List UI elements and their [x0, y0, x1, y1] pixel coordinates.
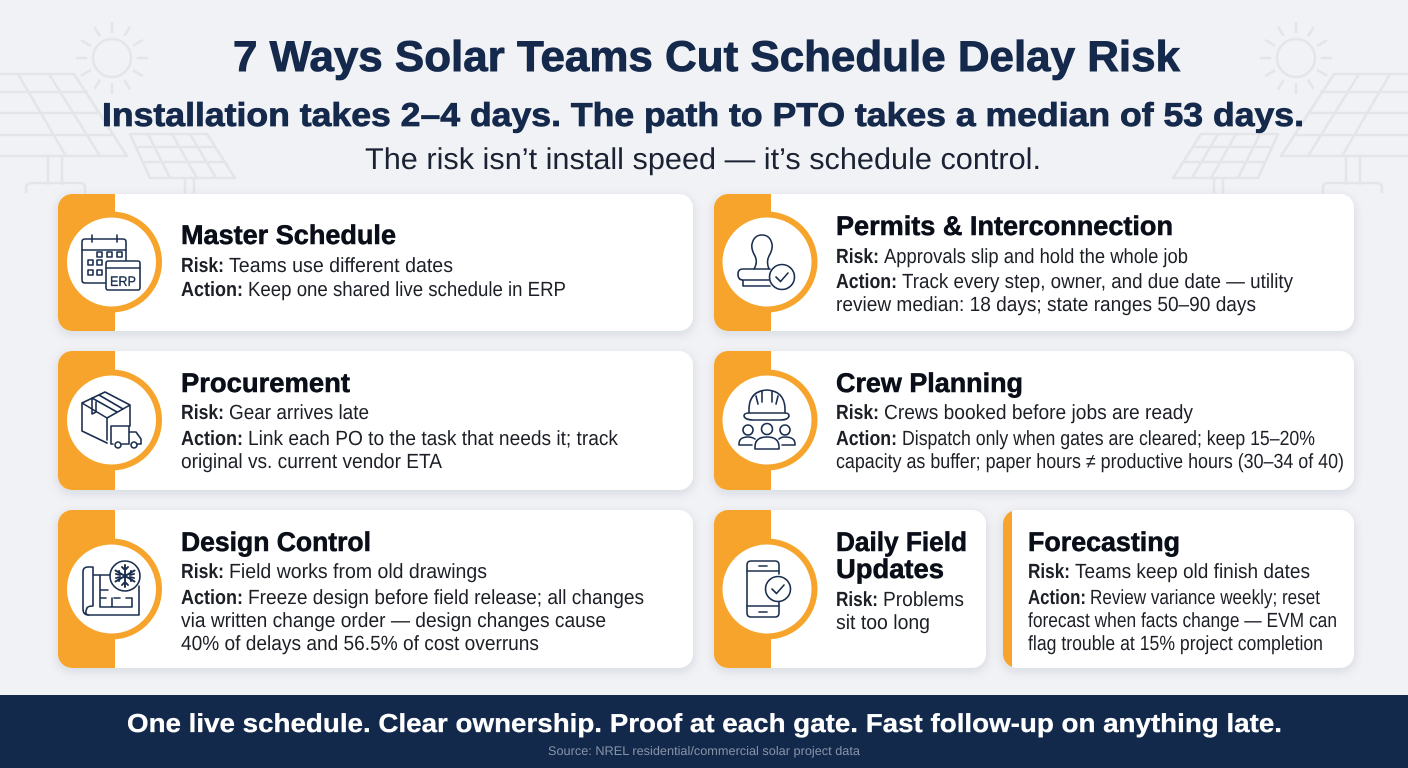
text: action: Action: [836, 270, 897, 293]
heading: daily field updates: Daily Field [836, 527, 967, 557]
text: action: flag trouble at 15% project completion [1028, 632, 1323, 655]
heading: daily field updates [836, 527, 967, 584]
footer message: One live schedule. Clear ownership. Proof at each gate. Fast follow-up on anything late. [127, 708, 1282, 738]
icon: box and truck [82, 392, 141, 448]
icon: phone with check [747, 561, 790, 617]
text: risk: Crews booked before jobs are ready [884, 401, 1194, 424]
text: risk: sit too long [836, 611, 930, 634]
text: risk: Risk: [1028, 560, 1070, 583]
text: risk: Risk: [836, 401, 879, 424]
text: action [836, 270, 1294, 316]
panel: permits and interconnection [714, 194, 1354, 331]
footer banner [0, 695, 1408, 768]
text: action [181, 586, 644, 655]
text: risk: Teams use different dates [229, 254, 453, 277]
text: action: Freeze design before field release; all changes [248, 586, 644, 609]
text: risk: Risk: [836, 588, 878, 611]
text: action: Action: [181, 278, 243, 301]
text: action: forecast when facts change — EVM can [1028, 609, 1337, 632]
text: action: capacity as buffer; paper hours ≠ productive hours (30–34 of 40) [836, 450, 1344, 473]
text: action [836, 427, 1344, 473]
title: 7 Ways Solar Teams Cut Schedule Delay Risk [233, 33, 1180, 81]
panel: design control [58, 510, 693, 668]
heading: daily field updates: Updates [836, 554, 944, 584]
icon: calendar with ERP window [82, 235, 140, 290]
panel: forecasting [1003, 510, 1354, 668]
text: action [181, 427, 619, 473]
text: risk: Approvals slip and hold the whole job [884, 245, 1188, 268]
text: risk: Teams keep old finish dates [1075, 560, 1310, 583]
text: risk: Risk: [181, 401, 224, 424]
text: action: Action: [1028, 586, 1086, 609]
panel: daily field updates [714, 510, 986, 668]
icon: calendar with ERP window: ERP [110, 273, 136, 289]
text: risk [836, 588, 964, 634]
text: action: Review variance weekly; reset [1090, 586, 1320, 609]
text: risk: Field works from old drawings [229, 560, 487, 583]
text: risk: Risk: [836, 245, 879, 268]
text: action: Link each PO to the task that needs it; track [248, 427, 619, 450]
text: action: Action: [181, 586, 243, 609]
text: action: via written change order — design changes cause [181, 609, 606, 632]
decorative solar art: right [1173, 23, 1408, 192]
panel: crew planning [714, 351, 1354, 490]
decorative solar art: left [0, 23, 235, 192]
text: risk: Risk: [181, 560, 224, 583]
tagline: The risk isn’t install speed — it’s schedule control. [365, 143, 1041, 176]
text: risk: Gear arrives late [229, 401, 369, 424]
text: action: Keep one shared live schedule in ERP [248, 278, 566, 301]
text: action: Action: [181, 427, 243, 450]
subtitle: Installation takes 2–4 days. The path to PTO takes a median of 53 days. [102, 96, 1304, 133]
heading: crew planning: Crew Planning [836, 368, 1023, 398]
heading: permits and interconnection: Permits & Interconnection [836, 211, 1173, 241]
icon: hard hat and crew [739, 390, 795, 449]
text: risk: Risk: [181, 254, 224, 277]
text: risk: Problems [883, 588, 964, 611]
icon: blueprint with snowflake [83, 561, 140, 615]
text: action: Action: [836, 427, 897, 450]
text: action [1028, 586, 1337, 655]
icon: stamp with check [738, 235, 794, 290]
text: action: review median: 18 days; state ranges 50–90 days [836, 293, 1256, 316]
header [102, 33, 1304, 176]
text: action: Track every step, owner, and due date — utility [902, 270, 1294, 293]
text: action: original vs. current vendor ETA [181, 450, 442, 473]
source note: Source: NREL residential/commercial solar project data [548, 744, 860, 758]
panel: procurement [58, 351, 693, 490]
heading: procurement: Procurement [181, 368, 350, 398]
heading: forecasting: Forecasting [1028, 527, 1180, 557]
text: action: Dispatch only when gates are cleared; keep 15–20% [902, 427, 1315, 450]
heading: master schedule: Master Schedule [181, 220, 396, 250]
text: action: 40% of delays and 56.5% of cost overruns [181, 632, 539, 655]
heading: design control: Design Control [181, 527, 371, 557]
panel: master schedule [58, 194, 693, 331]
